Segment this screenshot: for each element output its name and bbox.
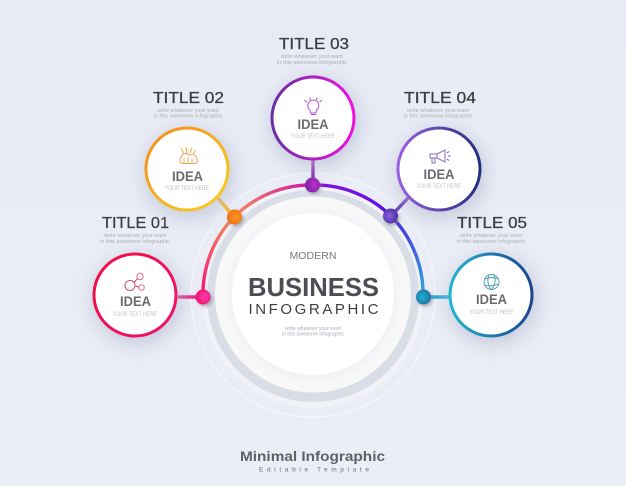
- text: title 01 description: write whatever your want: [104, 233, 167, 239]
- label: idea 5: IDEA: [476, 291, 507, 307]
- panel: title 01: [92, 215, 182, 345]
- label: idea 3: IDEA: [298, 116, 328, 132]
- text: title 03 description: in this awesome infographic: [277, 60, 348, 66]
- panel: title 02: [144, 90, 234, 219]
- footer subtitle: Editable Template: [259, 466, 369, 474]
- label: your text here 3: YOUR TEXT HERE: [291, 134, 335, 140]
- center text block: MODERN: [290, 250, 336, 262]
- panel: title 05: [448, 215, 538, 345]
- center text block: in this awesome infographic: [282, 332, 344, 338]
- icon: light bulb: [304, 98, 322, 114]
- text: title 04 description: [404, 108, 473, 120]
- label: your text here 5: YOUR TEXT HERE: [470, 310, 514, 316]
- text: title 02 description: write whatever your want: [157, 108, 220, 114]
- text: title 03 description: write whatever your want: [281, 54, 344, 60]
- label: idea 1: IDEA: [120, 293, 151, 309]
- text: title 01 description: in this awesome infographic: [100, 239, 171, 245]
- arc node 4: [383, 208, 400, 226]
- text: title 05 description: write whatever your want: [460, 233, 523, 239]
- text: title 02 description: in this awesome infographic: [154, 114, 223, 120]
- heading: title 05: TITLE 05: [457, 215, 527, 232]
- center text block: BUSINESS: [248, 272, 379, 302]
- icon: network share: [125, 273, 144, 290]
- label: idea 2: IDEA: [172, 168, 203, 184]
- center text block: [248, 250, 379, 338]
- heading: title 01: TITLE 01: [102, 215, 169, 232]
- arc node 1: [196, 290, 212, 306]
- arc node 5: [416, 290, 432, 306]
- label: idea 4: IDEA: [424, 166, 454, 182]
- text: title 03 description: [277, 54, 348, 66]
- icon: globe: [484, 274, 499, 290]
- text: title 05 description: [456, 233, 526, 245]
- text: title 05 description: in this awesome infographic: [456, 239, 526, 245]
- panel: title 03: [270, 36, 360, 168]
- icon: megaphone: [430, 150, 450, 163]
- text: title 04 description: in this awesome infographic: [404, 114, 473, 120]
- central concentric disc: [191, 173, 435, 417]
- center text block: INFOGRAPHIC: [248, 301, 379, 318]
- text: title 04 description: write whatever your want: [407, 108, 470, 114]
- label: your text here 1: YOUR TEXT HERE: [113, 312, 157, 318]
- arc node 3: [305, 178, 322, 194]
- center text block: write whatever your want: [285, 326, 342, 332]
- footer title: Minimal Infographic: [240, 448, 385, 464]
- label: your text here 4: YOUR TEXT HERE: [417, 184, 461, 190]
- text: title 01 description: [100, 233, 171, 245]
- heading: title 04: TITLE 04: [404, 90, 476, 107]
- connectors and arc: [178, 160, 449, 297]
- arc node 2: [227, 210, 244, 226]
- heading: title 02: TITLE 02: [153, 90, 224, 107]
- label: your text here 2: YOUR TEXT HERE: [165, 186, 209, 192]
- text: title 02 description: [154, 108, 223, 120]
- icon: cloud: [180, 147, 197, 164]
- panel: title 04: [396, 90, 486, 219]
- heading: title 03: TITLE 03: [279, 36, 349, 53]
